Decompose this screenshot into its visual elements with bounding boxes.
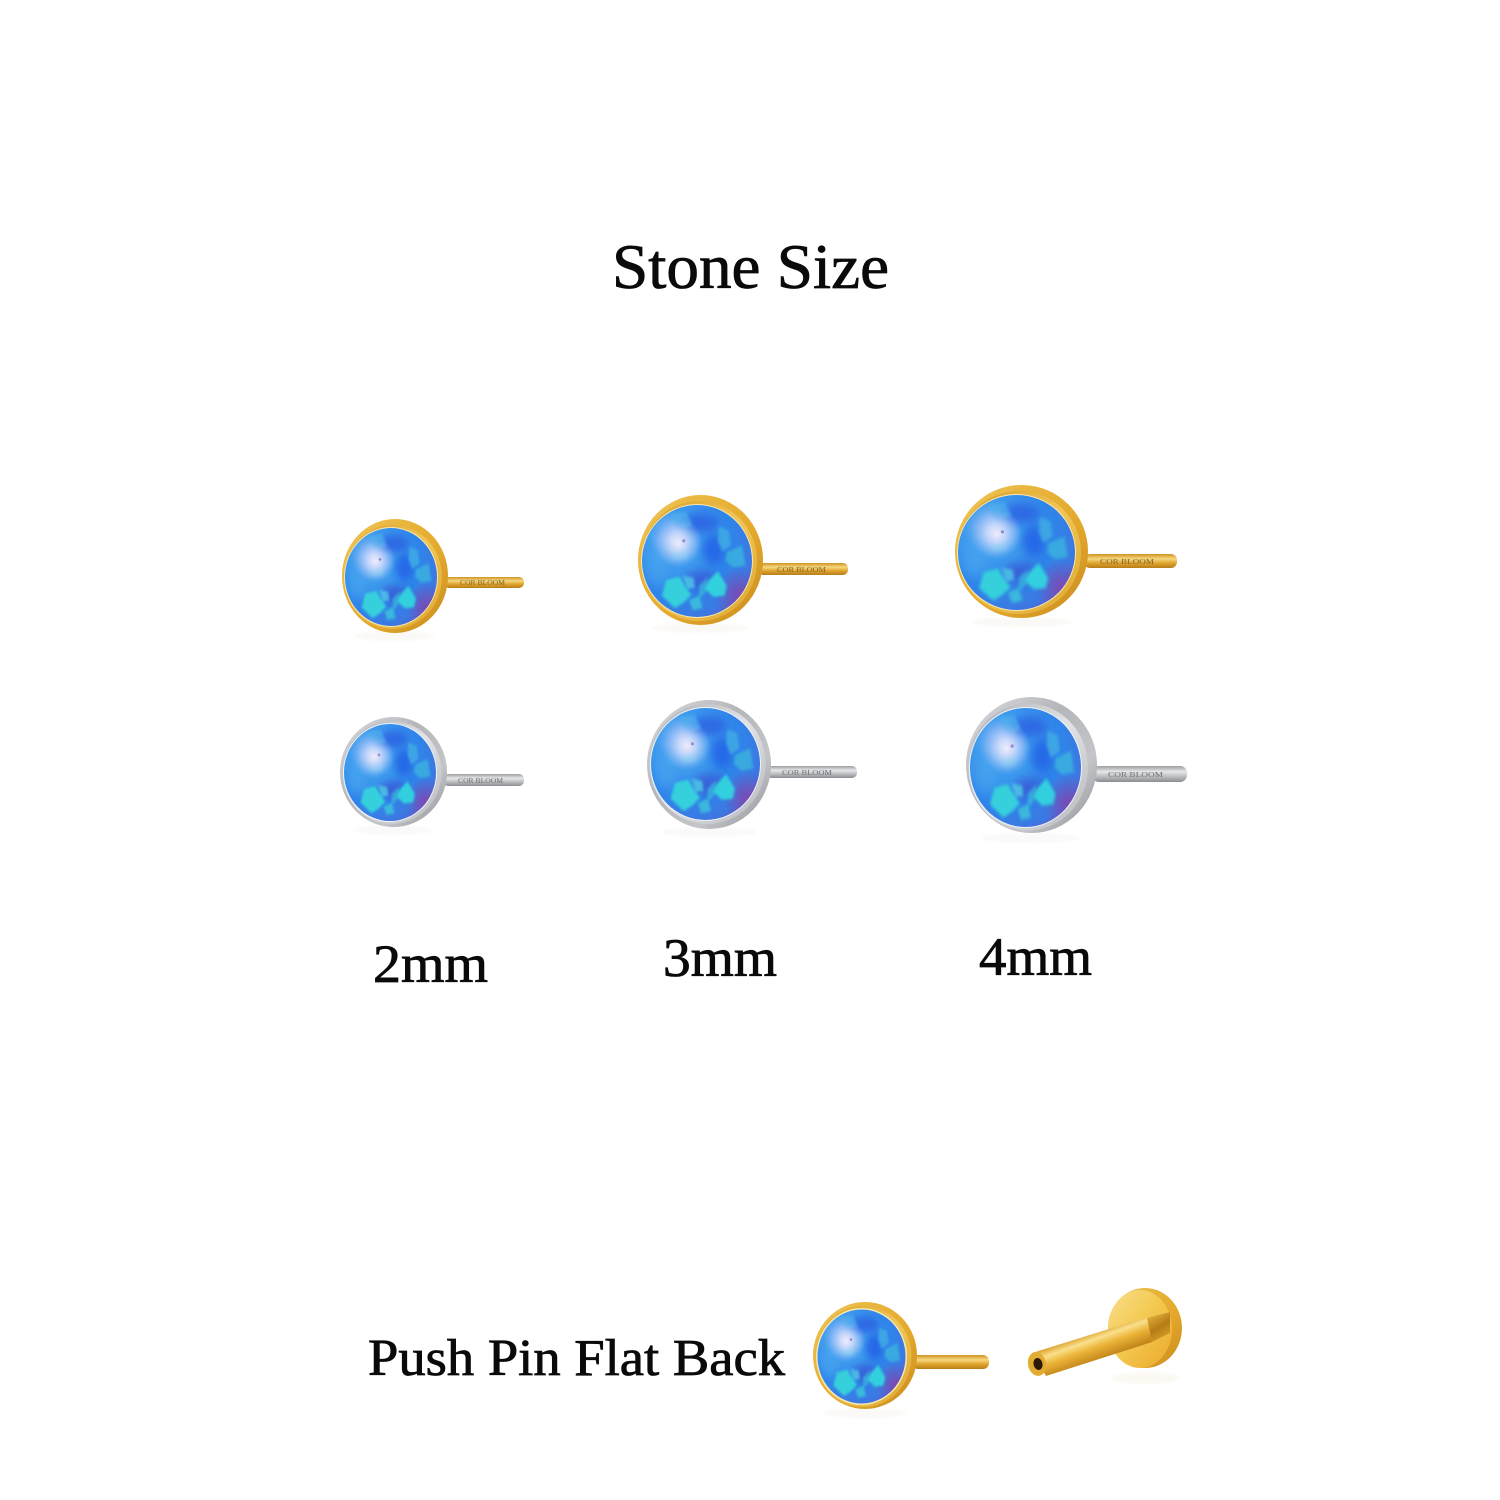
silver stud 3mm: COR BLOOM — [782, 769, 833, 777]
gold stud 2mm — [342, 519, 524, 641]
label: push pin flat back: Push Pin Flat Back — [368, 1330, 785, 1387]
flat back post — [1026, 1288, 1182, 1384]
gold stud 4mm: COR BLOOM — [1100, 558, 1155, 566]
gold stud 4mm — [955, 485, 1177, 627]
silver stud 4mm — [966, 697, 1187, 843]
flat back front stud — [813, 1302, 989, 1418]
silver stud 2mm: COR BLOOM — [458, 777, 504, 785]
gold stud 3mm — [638, 495, 848, 633]
gold stud 2mm: COR BLOOM — [460, 579, 506, 587]
size label 3mm: 3mm — [663, 928, 777, 988]
silver stud 4mm: COR BLOOM — [1108, 771, 1164, 779]
title: Stone Size — [612, 231, 889, 302]
gold stud 3mm: COR BLOOM — [777, 566, 827, 574]
silver stud 2mm — [340, 717, 524, 835]
size label 4mm: 4mm — [979, 927, 1092, 987]
size label 2mm: 2mm — [373, 934, 488, 994]
silver stud 3mm — [647, 700, 857, 837]
